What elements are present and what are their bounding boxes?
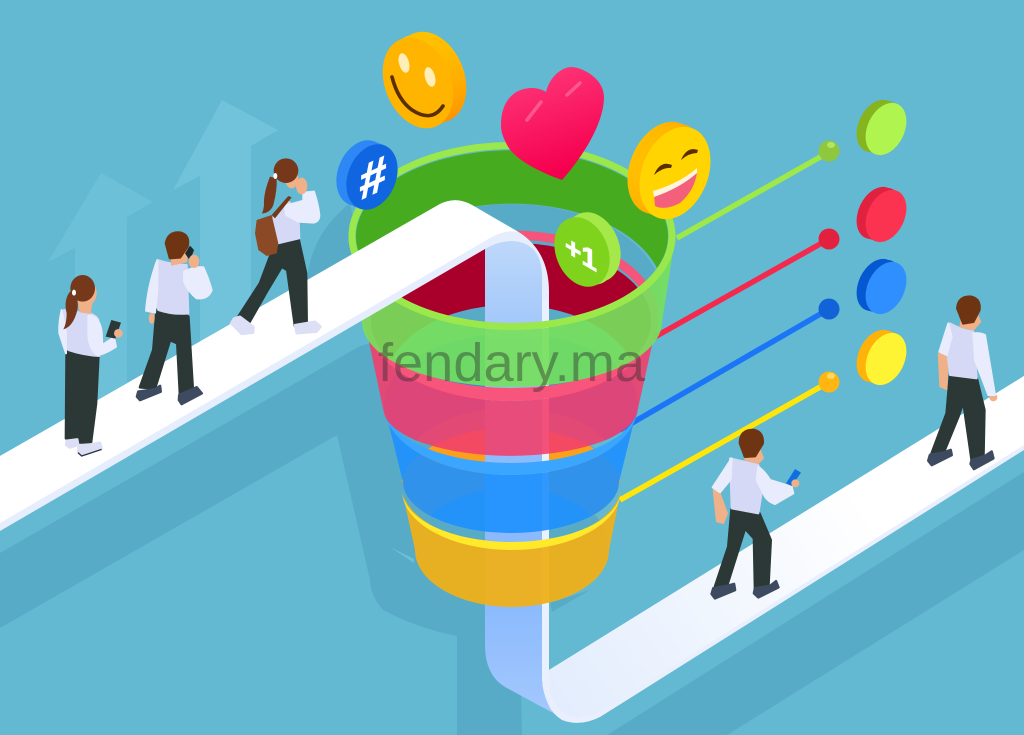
- icon: hashtag coin: [327, 132, 407, 218]
- icon: green disc: [849, 93, 914, 162]
- blue connector: [620, 298, 840, 430]
- person: man walking at right: [928, 297, 997, 469]
- green band: [348, 236, 676, 387]
- red rim back: [368, 235, 654, 397]
- icon: plus one coin: +1: [565, 230, 597, 279]
- right road base: [542, 290, 1024, 723]
- left road surface: [0, 200, 518, 523]
- yellow band: [402, 490, 621, 607]
- right road shadow: [607, 472, 1024, 735]
- vertical strip white edge: [542, 290, 549, 680]
- icon: hashtag coin: #: [360, 144, 386, 211]
- connector lines and end balls: [620, 140, 840, 500]
- person: woman with backpack: [231, 158, 321, 334]
- green rim: [352, 146, 672, 326]
- yellow connector: [620, 372, 840, 500]
- vertical blue strip: [485, 290, 553, 713]
- red band: [364, 316, 658, 456]
- person: man with blue phone: [712, 430, 801, 598]
- red back wall: [371, 243, 651, 361]
- background arrow: left: [48, 173, 153, 420]
- background arrow: right: [173, 100, 278, 380]
- shadow behind funnel rim: [307, 203, 370, 300]
- icon: blue disc: [849, 252, 914, 321]
- watermark: fendary.ma: [378, 334, 645, 393]
- funnel and road shadow: [0, 330, 522, 735]
- green connector: [677, 140, 840, 238]
- right road surface: [549, 376, 1024, 718]
- icon: laughing coin: [614, 111, 724, 230]
- red connector: [653, 228, 840, 338]
- icon: red disc: [849, 180, 914, 249]
- icon: heart: [501, 67, 604, 180]
- blue back wall: [394, 378, 621, 440]
- icon: plus one coin: [544, 204, 631, 295]
- yellow back wall: [402, 430, 620, 516]
- funnel front bands: [348, 236, 676, 607]
- light streak under funnel: [390, 547, 414, 563]
- funnel back walls: [352, 146, 672, 524]
- vertical strip top: [485, 241, 542, 300]
- left road with arc into funnel: [0, 200, 549, 531]
- funnel hole shadows: [363, 204, 661, 612]
- blue band: [384, 405, 638, 533]
- vertical strip and right road: [485, 290, 1024, 723]
- icon: smiley coin: [370, 21, 479, 139]
- person: woman with phone at left: [59, 275, 123, 456]
- left road edge: [0, 200, 549, 531]
- person: man on phone: [137, 233, 212, 404]
- icon: yellow disc: [849, 323, 914, 392]
- green back wall: [356, 150, 668, 268]
